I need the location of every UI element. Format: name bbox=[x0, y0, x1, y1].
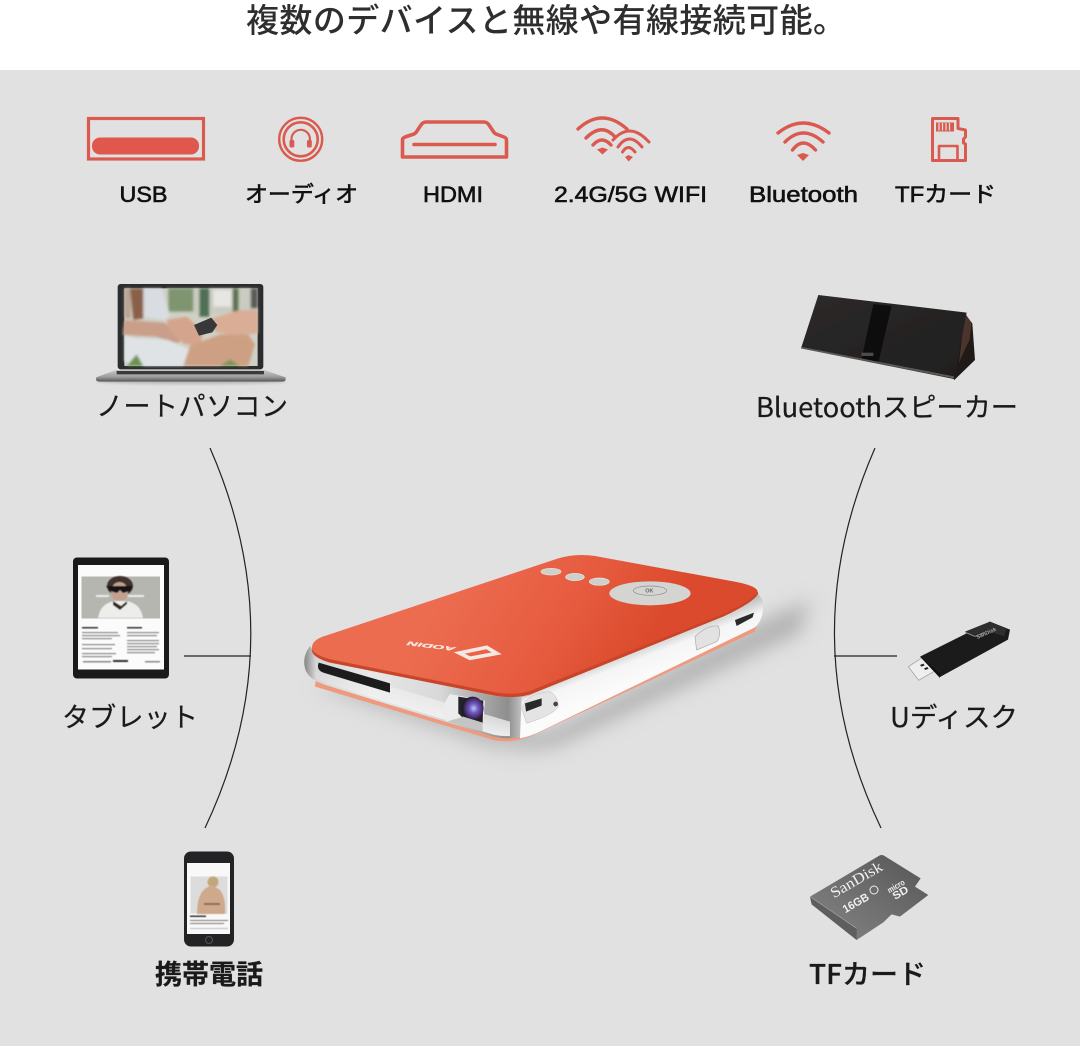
icon: TF card bbox=[932, 118, 966, 160]
micro SD card bbox=[810, 855, 928, 940]
icon: audio headphones bbox=[279, 118, 322, 161]
icon: HDMI port bbox=[402, 122, 506, 157]
projector shadow bbox=[313, 600, 810, 753]
label: USB: USB bbox=[120, 182, 168, 207]
right connection arc bbox=[834, 448, 897, 828]
USB drive: SanDisk bbox=[976, 627, 997, 641]
projector shell underside bbox=[315, 613, 760, 741]
label: mobile phone: 携帯電話 bbox=[155, 953, 263, 992]
projector side switch bbox=[695, 626, 720, 650]
micro SD card: SD bbox=[890, 884, 911, 903]
icon: USB port bbox=[88, 118, 204, 159]
label: HDMI: HDMI bbox=[423, 182, 483, 207]
label: laptop: ノートパソコン bbox=[96, 385, 288, 424]
projector logo bbox=[405, 640, 497, 658]
connection types row bbox=[88, 118, 996, 207]
USB drive bbox=[908, 622, 1010, 680]
projector side port bbox=[735, 613, 754, 626]
label: TF card: TFカード bbox=[895, 182, 996, 207]
tablet bbox=[73, 558, 169, 678]
projector control dial bbox=[609, 581, 691, 605]
projector card slot bbox=[318, 663, 390, 693]
projector lens housing bbox=[443, 694, 485, 731]
projector control dial: OK bbox=[645, 589, 653, 595]
icon: bluetooth wireless bbox=[778, 123, 829, 161]
laptop bbox=[96, 284, 286, 384]
label: Bluetooth speaker: Bluetoothスピーカー bbox=[756, 386, 1018, 425]
projector bbox=[304, 555, 810, 753]
micro SD card: SanDisk bbox=[827, 858, 886, 902]
label: USB drive: Uディスク bbox=[890, 696, 1018, 735]
label: Bluetooth: Bluetooth bbox=[749, 182, 858, 207]
mobile phone bbox=[184, 852, 234, 946]
projector orange top face bbox=[312, 556, 758, 697]
micro SD card: micro bbox=[885, 877, 906, 895]
projector silver front bbox=[304, 646, 528, 738]
Bluetooth speaker bbox=[801, 295, 975, 380]
micro SD card: 16GB bbox=[841, 891, 871, 916]
label: audio: オーディオ bbox=[245, 182, 358, 207]
projector logo: AODIN bbox=[405, 640, 458, 652]
label: wifi: 2.4G/5G WIFI bbox=[554, 182, 707, 207]
projector silver right side bbox=[520, 593, 763, 738]
label: TF card device: TFカード bbox=[809, 953, 926, 992]
projector micro USB port bbox=[522, 692, 558, 723]
left connection arc bbox=[184, 448, 251, 828]
projector top buttons bbox=[541, 568, 609, 585]
label: tablet: タブレット bbox=[62, 696, 198, 735]
icon: dual band wifi bbox=[578, 118, 649, 162]
